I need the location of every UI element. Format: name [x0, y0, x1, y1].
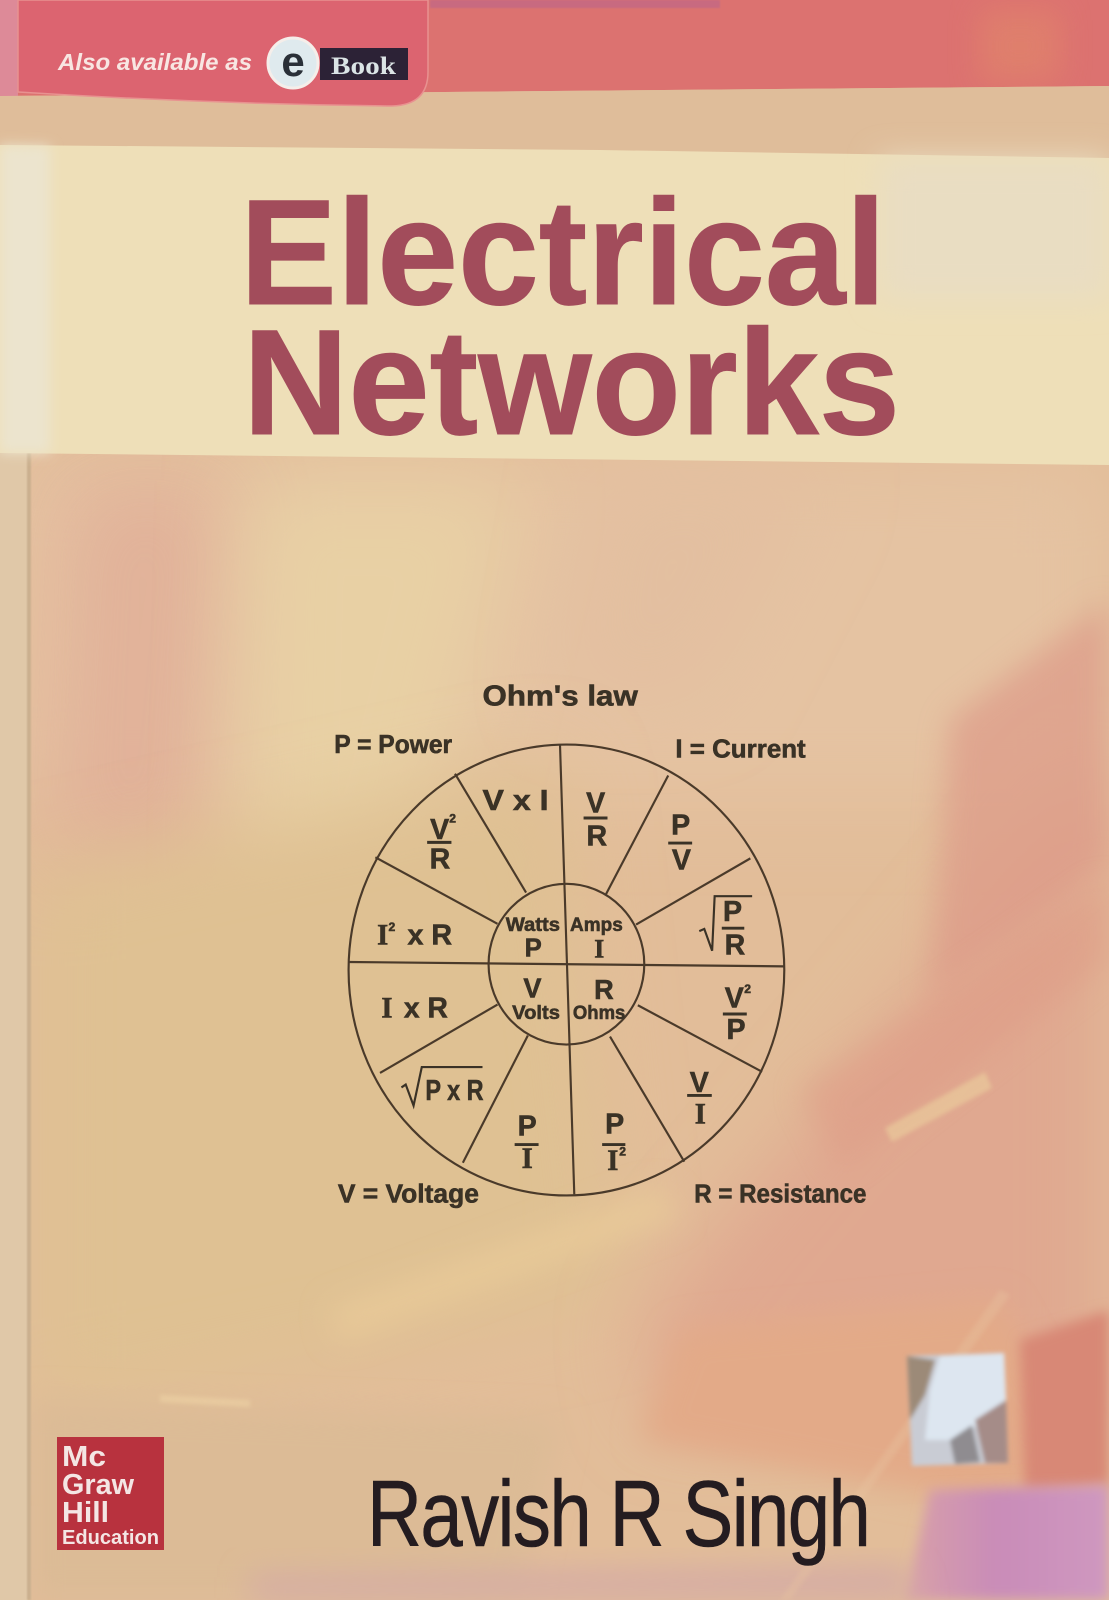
formulas: R	[725, 929, 745, 961]
title: Electrical	[240, 168, 886, 336]
formulas: V	[725, 982, 745, 1015]
formulas: P	[605, 1108, 624, 1141]
formulas: V	[430, 814, 450, 846]
ebook badge: e	[281, 38, 305, 85]
label: current: I = Current	[675, 735, 806, 763]
publisher logo: Hill	[62, 1497, 109, 1529]
top red band	[0, 0, 1109, 160]
formulas	[377, 785, 751, 1177]
centre units: R	[594, 974, 614, 1005]
centre units	[506, 914, 626, 1024]
formulas: V	[690, 1067, 710, 1099]
formulas: 2	[449, 812, 456, 826]
Ohm's law wheel	[334, 680, 866, 1209]
ebook badge: Book	[331, 53, 396, 80]
heading: Ohm's law: Ohm's law	[482, 680, 638, 712]
formulas: 2	[389, 920, 396, 934]
tan strip	[0, 86, 1109, 160]
centre units: Amps	[570, 914, 623, 936]
ebook text: Also available as	[57, 49, 252, 75]
ebook tab	[18, 0, 428, 106]
centre units: Watts	[506, 914, 560, 936]
title band	[0, 145, 1109, 465]
formulas: 2	[744, 982, 751, 996]
formulas: R	[586, 820, 607, 852]
formulas: I	[607, 1145, 618, 1177]
formulas: P	[727, 1014, 746, 1046]
wheel lines	[349, 745, 784, 1195]
formulas: V	[586, 787, 606, 820]
formulas: I	[522, 1143, 533, 1175]
title	[240, 168, 900, 466]
formulas: P	[723, 896, 742, 928]
publisher logo: Education	[62, 1527, 159, 1549]
cover background	[0, 453, 1109, 1600]
label: voltage: V = Voltage	[338, 1181, 479, 1209]
centre units: Ohms	[573, 1002, 626, 1024]
centre units: V	[523, 972, 542, 1003]
formula bars and radicals	[401, 818, 752, 1145]
ebook badge	[268, 38, 408, 88]
formulas: 2	[619, 1144, 626, 1158]
author: Ravish R Singh	[367, 1462, 871, 1567]
publisher logo: Graw	[62, 1469, 134, 1501]
formulas: I	[377, 919, 388, 952]
centre units: Volts	[512, 1002, 560, 1024]
formulas: x R	[404, 992, 448, 1024]
left margin strip	[0, 150, 28, 1600]
formulas: V	[672, 844, 692, 876]
publisher logo: Mc	[62, 1441, 106, 1473]
publisher logo	[57, 1437, 164, 1550]
sticker mark	[907, 1353, 1008, 1466]
centre units: P	[525, 934, 542, 963]
label: power: P = Power	[334, 731, 452, 759]
formulas: P	[671, 809, 690, 841]
formulas: I	[381, 992, 393, 1024]
formulas: P x R	[425, 1075, 484, 1107]
label: resistance: R = Resistance	[694, 1181, 866, 1209]
formulas: R	[430, 843, 450, 876]
formulas: x R	[407, 919, 452, 952]
title: Networks	[243, 298, 900, 466]
formulas: I	[695, 1098, 706, 1131]
centre units: I	[594, 934, 604, 963]
formulas: V x I	[482, 785, 549, 817]
formulas: P	[518, 1110, 537, 1143]
